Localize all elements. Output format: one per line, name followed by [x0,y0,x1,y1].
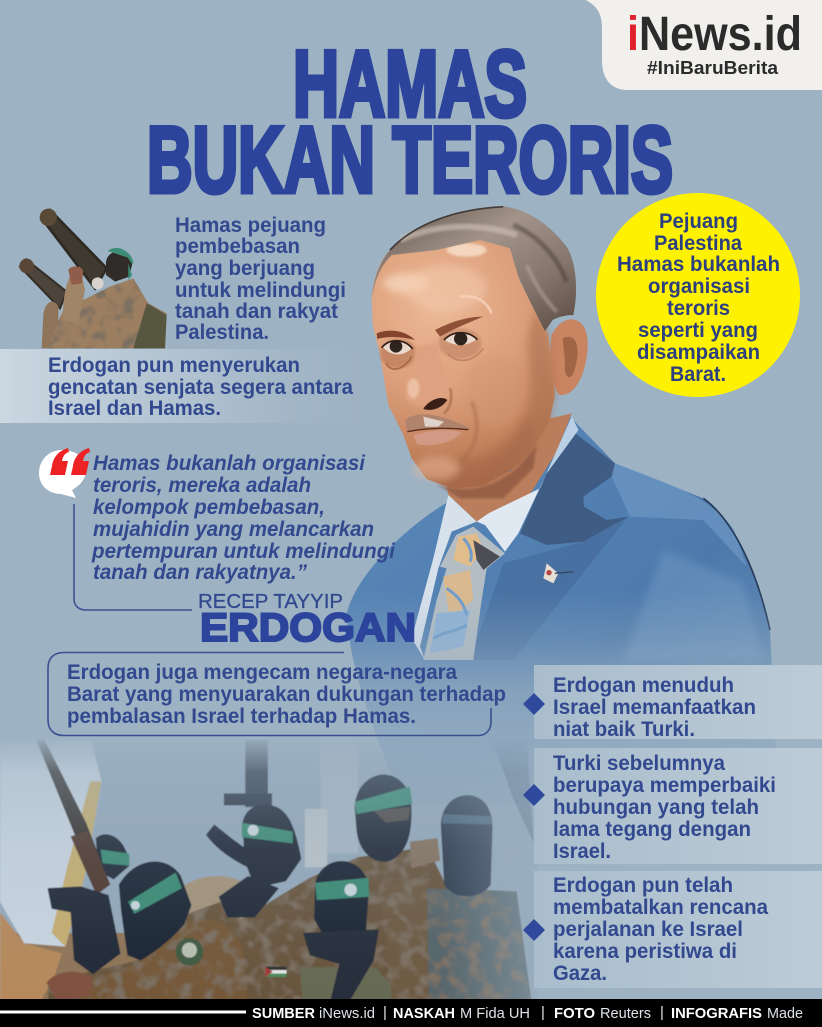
icon: soldier with launchers [19,209,167,348]
quote text: teroris, mereka adalah [93,474,311,497]
footer credits: Reuters [600,1005,651,1022]
logo: iNews.id: iNews.id [627,8,802,61]
icon: diamond bullet [523,784,545,806]
quote attribution: ERDOGAN [200,606,416,650]
footer credits: | [660,1004,664,1021]
panel: accusation: Israel memanfaatkan [553,696,756,719]
icon: diamond bullet [523,693,545,715]
panel: cancelled trip: karena peristiwa di [553,940,737,963]
callout: yellow circle [596,193,800,397]
quote text: pertempuran untuk melindungi [91,540,396,563]
panel: ceasefire call: gencatan senjata segera antara [48,376,353,399]
callout: yellow circle: organisasi [648,275,750,298]
footer credits: M Fida UH [460,1005,530,1022]
soldier foreground [119,861,191,962]
panel: Turkish relations: lama tegang dengan [553,818,751,841]
eyebrows [377,331,415,340]
panel: condemnation of the West: Erdogan juga mengecam negara-negara [67,661,457,684]
title [147,31,673,212]
text: Hamas pejuang: yang berjuang [175,257,315,280]
footer credits: Made [767,1005,803,1022]
quote attribution [74,504,416,650]
callout: yellow circle: Pejuang [659,210,738,233]
quote text: kelompok pembebasan, [93,496,325,519]
hair [372,207,576,331]
panel: cancelled trip: Erdogan pun telah [553,874,733,897]
quote attribution: RECEP TAYYIP [198,591,343,613]
text: Hamas pejuang: tanah dan rakyat [175,300,338,323]
photo: masked fighters [0,735,540,1007]
panel: condemnation of the West [48,652,506,736]
face [372,238,555,489]
quote text: Hamas bukanlah organisasi [93,452,366,475]
logo: iNews.id [586,0,822,90]
nose [407,344,438,406]
callout: yellow circle: Barat. [670,363,726,386]
panel: accusation: Erdogan menuduh [553,674,734,697]
eye sockets [380,338,417,368]
footer credits [0,999,822,1027]
panel: ceasefire call [0,349,385,423]
panel: condemnation of the West: Barat yang menyuarakan dukungan terhadap [67,683,506,706]
panel: cancelled trip: perjalanan ke Israel [553,918,743,941]
callout: yellow circle: teroris [667,297,730,320]
soldier at far right [441,795,493,896]
panel: Turkish relations: Israel. [553,840,611,863]
mist over photo [0,735,540,1003]
callout: yellow circle: Hamas bukanlah [617,253,780,276]
panel: accusation: niat baik Turki. [553,718,695,741]
callout: yellow circle: Palestina [654,232,742,255]
left rifle [36,740,110,892]
footer credits: | [383,1004,387,1021]
text: Hamas pejuang: pembebasan [175,235,300,258]
flag [0,740,102,947]
icon: diamond bullet [523,919,545,941]
footer credits: INFOGRAFIS [671,1005,762,1022]
footer credits: FOTO [554,1005,595,1022]
panel: accusation [523,665,822,741]
title: HAMAS [293,31,527,136]
lapel pin [543,563,558,583]
panel: ceasefire call: Erdogan pun menyerukan [48,354,300,377]
eyes [382,332,483,369]
bodies mass [48,847,532,1007]
footer credits: SUMBER [252,1005,315,1022]
logo: iNews.id: #IniBaruBerita [647,58,779,78]
icon: quotation bubble [39,448,90,498]
tie [423,527,505,660]
quote text: tanah dan rakyatnya.” [93,561,307,584]
panel: cancelled trip: Gaza. [553,962,607,985]
panel: cancelled trip: membatalkan rencana [553,896,768,919]
soldier front centre [300,967,410,1007]
footer credits: iNews.id [319,1005,375,1022]
text: Hamas pejuang [175,214,346,344]
panel: cancelled trip [523,871,822,988]
shirt and collar [412,495,477,660]
panel: condemnation of the West: pembalasan Israel terhadap Hamas. [67,705,416,728]
soldier far-left rear [96,834,129,879]
text: Hamas pejuang: Hamas pejuang [175,214,326,237]
jacket [347,417,776,762]
palestinian flag patch [265,967,287,977]
portrait: Erdogan [347,207,778,805]
footer credits: | [541,1004,545,1021]
callout: yellow circle: disampaikan [637,341,760,364]
neck [445,413,572,522]
soldier in camo right [355,774,412,862]
text: Hamas pejuang: Palestina. [175,321,269,344]
panel: Turkish relations: hubungan yang telah [553,796,759,819]
text: Hamas pejuang: untuk melindungi [175,279,346,302]
ear [550,319,588,395]
moustache and mouth [405,414,472,431]
panel: Turkish relations [523,748,822,864]
panel: Turkish relations: Turki sebelumnya [553,752,725,775]
rifle in centre [245,740,268,807]
quote text [91,452,396,584]
quote text: mujahidin yang melancarkan [93,518,374,541]
soldier centre [242,805,301,888]
callout: yellow circle: seperti yang [638,319,758,342]
panel: ceasefire call: Israel dan Hamas. [48,397,221,420]
panel: Turkish relations: berupaya memperbaiki [553,774,776,797]
footer credits: NASKAH [393,1005,455,1022]
